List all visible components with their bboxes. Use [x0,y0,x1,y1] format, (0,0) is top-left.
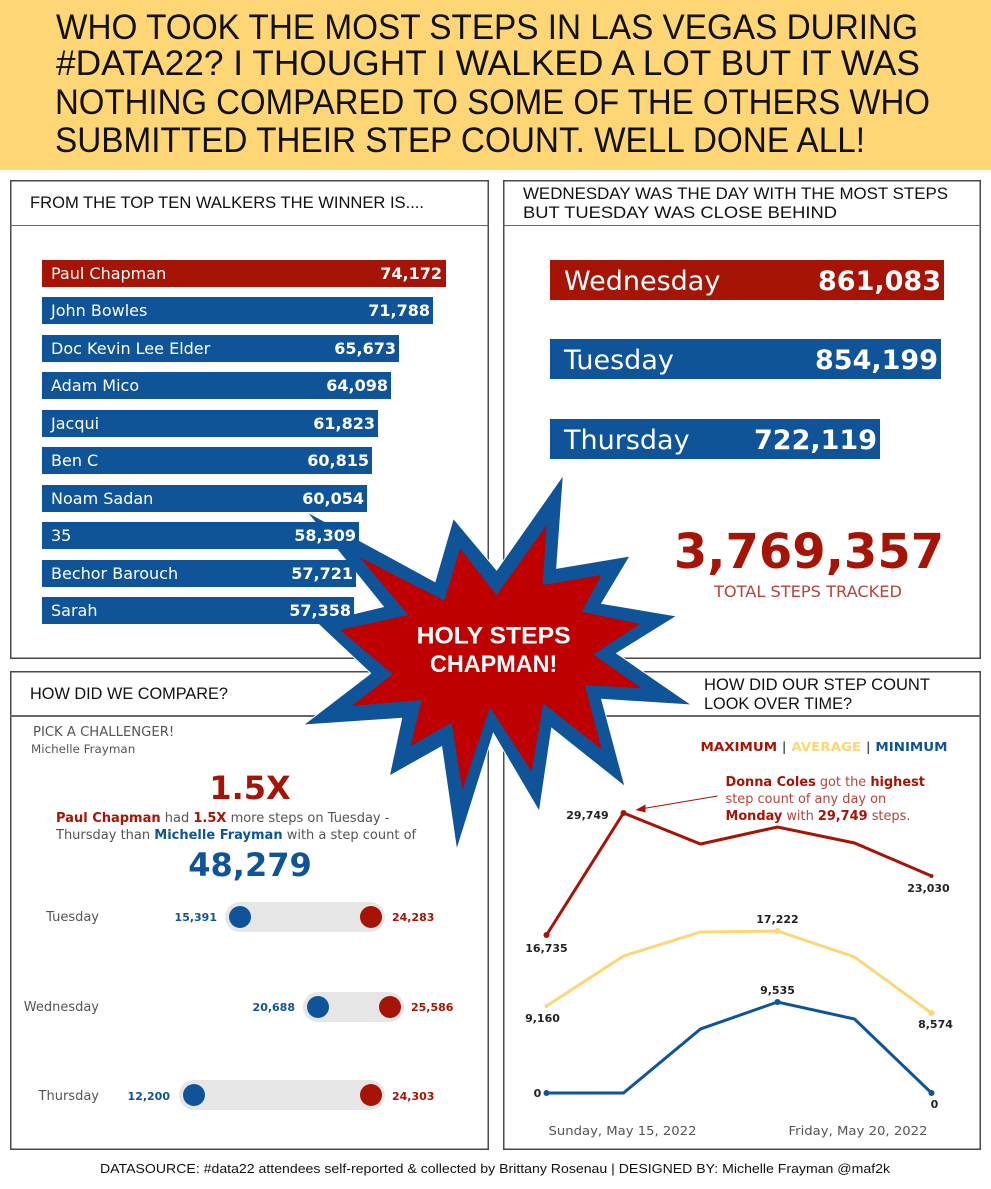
row: Tuesday: 24,283 [392,911,434,924]
heading: step count over time: LOOK OVER TIME? [704,695,852,713]
bar: Thursday [550,419,880,459]
comparison sentence: Thursday than Michelle Frayman with a step count of [56,828,416,843]
starburst: red inner [340,525,642,790]
bar chart: top ten walkers: Paul Chapman [51,264,166,283]
callout: highest step count: Donna Coles got the highest [726,775,925,790]
row: Wednesday [24,992,454,1022]
bar: Wednesday: Wednesday [564,266,720,297]
heading: steps by day [523,185,948,222]
data labels: 0 [931,1098,939,1111]
panel: steps by day [503,180,981,659]
line markers [544,810,934,1096]
row: Wednesday: 25,586 [411,1001,454,1014]
starburst text: HOLY STEPS [417,622,571,649]
bar: Tuesday: 854,199 [815,345,938,376]
callout: highest step count: step count of any day on [726,792,886,807]
bar chart: top ten walkers: Bechor Barouch [51,564,178,583]
date axis labels: Sunday, May 15, 2022 [548,1123,696,1138]
date axis labels: Friday, May 20, 2022 [788,1123,928,1138]
total steps caption: TOTAL STEPS TRACKED [714,582,902,601]
row: Tuesday [45,902,434,932]
bar: Thursday: Thursday [564,425,690,456]
row: Tuesday: 15,391 [175,911,217,924]
bar chart: top ten walkers: 60,054 [302,489,364,508]
data labels: 29,749 [566,809,609,822]
legend: MAXIMUM | AVERAGE | MINIMUM [700,740,948,754]
footer credits: DATASOURCE: #data22 attendees self-reported & collected by Brittany Rosenau | DESIGNED BY: Michelle Frayman @maf2k [100,1161,891,1176]
bar chart: top ten walkers: 71,788 [368,301,430,320]
heading: step count over time [704,676,930,713]
challenger step count: 48,279 [188,846,312,884]
bar: Wednesday: 861,083 [818,266,941,297]
bar chart: top ten walkers: Noam Sadan [51,489,153,508]
title banner: #DATA22? I THOUGHT I WALKED A LOT BUT IT WAS [56,44,920,83]
title banner: NOTHING COMPARED TO SOME OF THE OTHERS WHO [55,83,930,122]
starburst callout [305,476,690,848]
arrow to peak [636,796,718,812]
row: Thursday: Thursday [38,1089,99,1104]
heading: steps by day: WEDNESDAY WAS THE DAY WITH THE MOST STEPS [523,185,948,203]
heading: top ten walkers: FROM THE TOP TEN WALKERS THE WINNER IS.... [30,194,424,212]
bar: Tuesday [550,339,941,379]
total steps number: 3,769,357 [674,524,944,580]
comparison sentence [56,811,416,843]
panel: step count over time [503,671,981,1150]
bar: Thursday: 722,119 [754,425,877,456]
bar chart: top ten walkers: 64,098 [326,376,388,395]
bar chart: top ten walkers: John Bowles [51,301,147,320]
row: Thursday: 12,200 [128,1090,170,1103]
data labels: 17,222 [756,913,799,926]
heading: steps by day: BUT TUESDAY WAS CLOSE BEHIND [523,204,837,222]
data labels [525,809,953,1111]
heading: step count over time: HOW DID OUR STEP COUNT [704,676,930,694]
bar chart: top ten walkers [42,260,446,624]
dumbbell chart: daily comparison [24,902,454,1110]
data labels: 16,735 [525,942,568,955]
data labels: 9,535 [760,984,795,997]
bar: Tuesday: Tuesday [564,345,674,376]
title banner: WHO TOOK THE MOST STEPS IN LAS VEGAS DURING [56,8,918,47]
starburst text [417,622,571,678]
callout: highest step count [726,775,925,824]
comparison sentence: Paul Chapman had 1.5X more steps on Tuesday - [56,811,389,826]
title banner [0,0,991,170]
line: average [546,931,932,1013]
panel: how did we compare [10,671,489,1150]
bar chart: top ten walkers: Ben C [51,451,98,470]
row: Thursday: 24,303 [392,1090,434,1103]
starburst text: CHAPMAN! [430,651,557,678]
bar chart: top ten walkers: 57,358 [289,601,351,620]
data labels: 8,574 [918,1018,953,1031]
bar chart: top ten walkers: 35 [51,526,71,545]
panel: top ten walkers [10,180,489,659]
data labels: 23,030 [907,882,950,895]
row: Tuesday: Tuesday [45,910,99,925]
bar chart: top ten walkers: Sarah [51,601,97,620]
bar: Wednesday [550,260,944,300]
data labels: 0 [534,1087,542,1100]
heading: how did we compare: HOW DID WE COMPARE? [30,685,228,703]
callout: highest step count: Monday with 29,749 steps. [726,809,910,824]
challenger picker [31,725,174,756]
date axis labels [548,1123,928,1138]
bar chart: top ten walkers: Doc Kevin Lee Elder [51,339,210,358]
bar chart: top ten walkers: 57,721 [291,564,353,583]
title banner: SUBMITTED THEIR STEP COUNT. WELL DONE ALL! [55,121,865,160]
challenger picker: PICK A CHALLENGER! [33,725,174,740]
line: maximum [546,813,932,935]
bar chart: top ten walkers: Jacqui [51,414,99,433]
bar chart: top ten walkers: 61,823 [313,414,375,433]
starburst: blue outer [303,475,692,850]
challenger picker: Michelle Frayman [31,742,135,756]
line: minimum [546,1002,932,1093]
bar chart: top ten walkers: 58,309 [294,526,356,545]
bar chart: top ten walkers: 60,815 [307,451,369,470]
bar chart: top ten walkers: Adam Mico [51,376,139,395]
bar chart: top ten walkers: 74,172 [380,264,442,283]
data labels: 9,160 [525,1012,560,1025]
line chart: maximum, average, minimum [525,740,953,1138]
row: Wednesday: 20,688 [253,1001,295,1014]
bar chart: top ten walkers: 65,673 [334,339,396,358]
multiplier 1.5X: 1.5X [209,769,291,807]
row: Thursday [38,1080,434,1110]
row: Wednesday: Wednesday [24,1000,99,1015]
